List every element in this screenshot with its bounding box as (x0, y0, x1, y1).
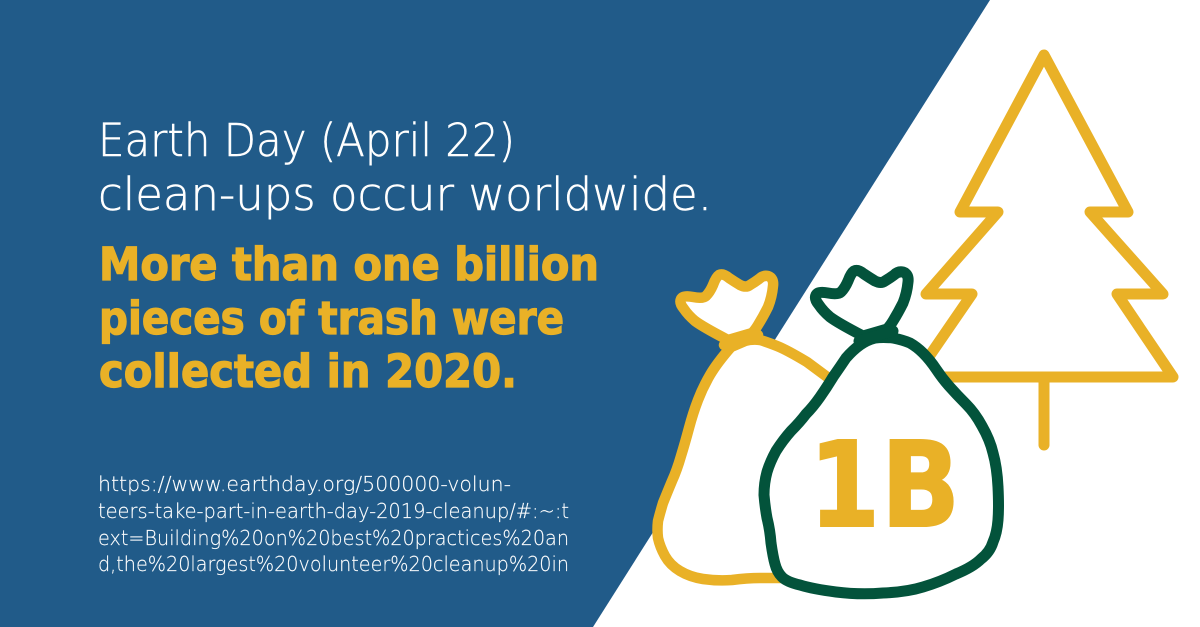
headline: one billion pieces of trash: More than one billion (99, 238, 599, 291)
bag outline (764, 270, 998, 594)
heading: Earth Day intro (98, 114, 712, 221)
headline: one billion pieces of trash: collected in 2020. (99, 345, 517, 398)
label: 1B: 1 (809, 416, 880, 554)
source URL text: ext=Building%20on%20best%20practices%20an (98, 526, 569, 550)
icon: pine tree (915, 55, 1173, 445)
heading: Earth Day intro: Earth Day (April 22) (98, 114, 515, 167)
icon: yellow trash bag (658, 274, 838, 580)
label: 1B: B (881, 416, 960, 554)
source URL text (98, 472, 569, 576)
source URL text: teers-take-part-in-earth-day-2019-cleanup/#:~:t (98, 499, 569, 523)
source URL text: https://www.earthday.org/500000-volun- (98, 472, 511, 496)
source URL text: d,the%20largest%20volunteer%20cleanup%20in (98, 552, 569, 576)
label: 1B (809, 416, 960, 554)
icon: green trash bag with 1B (764, 270, 998, 594)
headline: one billion pieces of trash (99, 238, 599, 398)
headline: one billion pieces of trash: pieces of trash were (99, 292, 564, 345)
heading: Earth Day intro: clean-ups occur worldwide. (98, 168, 712, 221)
